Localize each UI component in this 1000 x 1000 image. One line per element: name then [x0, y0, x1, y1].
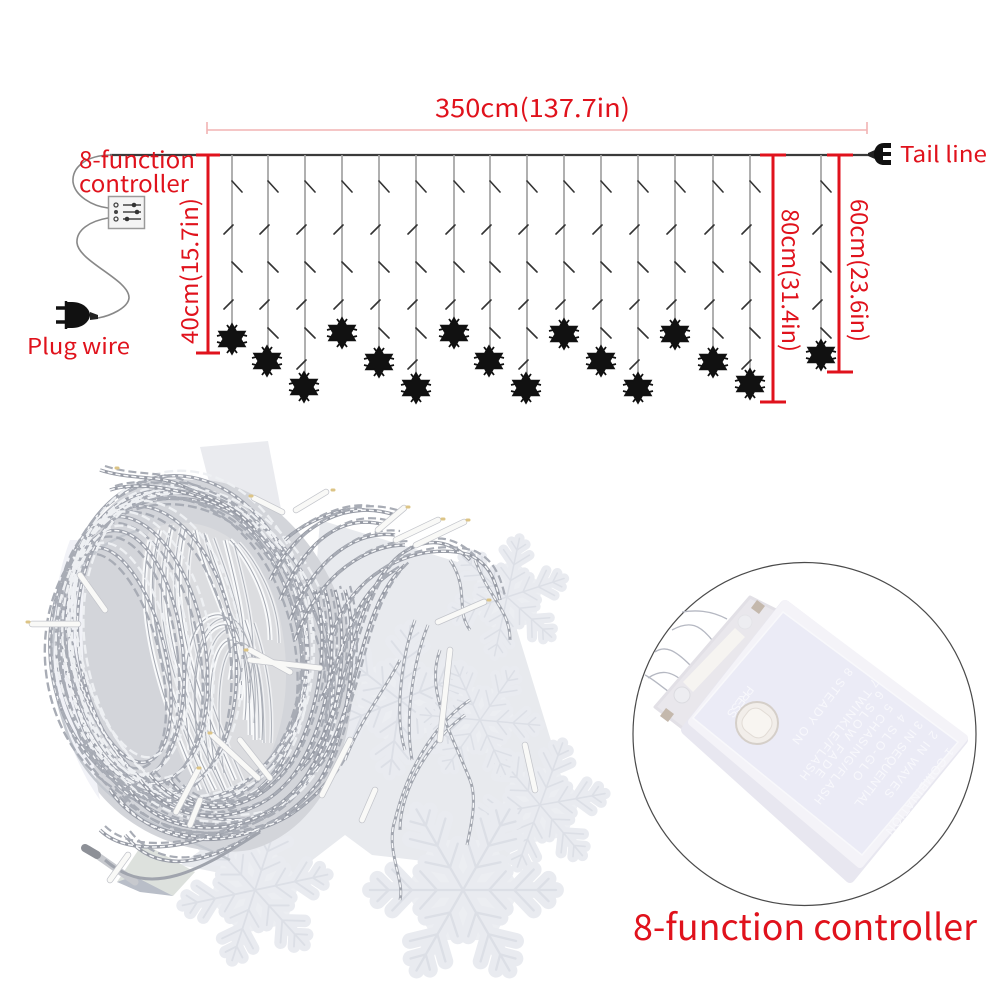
icon: plug	[56, 301, 98, 329]
embossed function list: 7 TWINKLE/FLASH	[797, 676, 882, 783]
pale body of snowflake pile	[180, 520, 560, 885]
controller back cap	[655, 597, 780, 730]
clear tubes	[145, 525, 279, 793]
dimension: 80cm: 80cm(31.4in)	[775, 209, 809, 352]
embossed function list: 2 IN WAVES	[881, 728, 941, 801]
outer clear tube	[52, 530, 230, 860]
wire to plug	[77, 218, 129, 318]
coil interior	[54, 479, 353, 852]
controller body top	[692, 604, 964, 864]
label: 8-function controller: 8-function	[79, 141, 195, 175]
width dimension line: 350cm(137.7in)	[435, 89, 630, 125]
caption: 8-function controller: 8-function controller	[633, 899, 978, 951]
embossed function list: 3 IN SEQUENTIAL	[851, 718, 926, 811]
controller face	[693, 612, 958, 855]
controller body side	[686, 605, 963, 878]
label: 8-function controller: controller	[79, 165, 189, 199]
controller wires	[645, 611, 727, 698]
button	[736, 702, 778, 744]
label: 8-function controller	[79, 141, 195, 199]
plug	[85, 843, 195, 896]
embossed function list: 4 SLO-GLO	[849, 711, 909, 784]
label: tail line: Tail line	[900, 137, 987, 169]
icons: black snowflakes	[217, 318, 836, 403]
icon: controller box	[108, 196, 144, 228]
circle frame	[633, 562, 976, 906]
dimension: 60cm	[827, 155, 878, 372]
width dimension line	[207, 89, 867, 134]
dimension: 60cm: 60cm(23.6in)	[844, 199, 878, 342]
embossed function list: 1 COMBINATION	[882, 745, 957, 837]
embossed function list: PRESS	[724, 683, 757, 720]
wire to controller	[73, 155, 112, 208]
dimension: 80cm	[760, 155, 809, 402]
embossed function list: 5 CHASING/FLASH	[811, 701, 896, 807]
label: plug wire: Plug wire	[27, 329, 130, 361]
embossed function list	[724, 665, 957, 837]
panel: controller close-up	[633, 562, 976, 906]
LED bulbs	[27, 468, 535, 880]
main wire	[110, 154, 868, 156]
icon: tail plug	[868, 143, 891, 165]
photo: coiled snowflake light string	[9, 441, 623, 1000]
dimension: 40cm	[171, 155, 220, 353]
hanging strands	[224, 155, 831, 379]
dimension: 40cm: 40cm(15.7in)	[171, 198, 205, 344]
diagram: curtain light dimensions	[27, 89, 987, 403]
pale snowflakes	[163, 526, 623, 1000]
embossed function list: 8 STEADY ON	[789, 665, 856, 747]
white controller box behind coil	[200, 441, 285, 560]
braided wires	[9, 443, 510, 900]
embossed function list: 6 SLOW FADE	[812, 688, 887, 780]
